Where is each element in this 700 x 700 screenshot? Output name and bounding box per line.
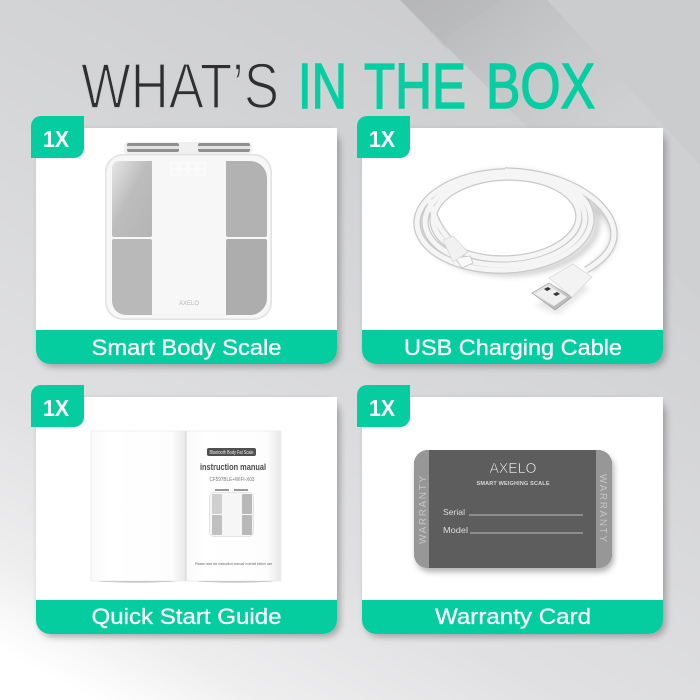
icon: warranty card: Serial: [443, 507, 465, 517]
icon: body scale: [105, 142, 272, 320]
label band: smart body scale: Smart Body Scale: [92, 335, 282, 360]
badge: quantity 1X: 1X: [369, 395, 396, 421]
label band: smart body scale: [36, 330, 337, 364]
icon: warranty card: AXELO: [490, 460, 536, 477]
title: THE: [364, 50, 466, 122]
title: [81, 50, 595, 122]
icon: warranty card: Model: [443, 525, 468, 535]
label band: warranty card: Warranty Card: [435, 604, 591, 629]
icon: instruction manual: Bluetooth Body Fat Scale: [210, 450, 254, 456]
title: BOX: [486, 50, 595, 122]
icon: usb cable: [415, 169, 614, 314]
label band: usb charging cable: [362, 330, 663, 364]
badge: quantity 1X: 1X: [43, 126, 70, 152]
badge: quantity 1X: [31, 385, 84, 427]
icon: instruction manual: CF597BLE+WIFI-X03: [210, 477, 254, 483]
icon: warranty card: WARRANTY: [418, 476, 429, 544]
label band: quick start guide: Quick Start Guide: [92, 604, 282, 629]
panel: warranty card: [357, 385, 666, 637]
title: WHAT’S: [81, 50, 279, 122]
icon: instruction manual: Please read the instruction manual in detail before use: [195, 562, 272, 566]
badge: quantity 1X: [31, 116, 84, 158]
icon: instruction manual: [91, 431, 281, 582]
label band: quick start guide: [36, 600, 337, 634]
label band: usb charging cable: USB Charging Cable: [404, 335, 622, 360]
title: IN: [298, 50, 347, 122]
icon: warranty card: WARRANTY: [597, 474, 608, 542]
panel: usb charging cable: [357, 116, 666, 367]
icon: body scale: AXELO: [179, 300, 199, 307]
panel: quick start guide: [31, 385, 340, 637]
badge: quantity 1X: [357, 385, 410, 427]
badge: quantity 1X: [357, 116, 410, 158]
badge: quantity 1X: 1X: [43, 395, 70, 421]
icon: warranty card: [414, 450, 614, 572]
panel: smart body scale: [31, 116, 340, 367]
icon: warranty card: SMART WEIGHING SCALE: [476, 481, 550, 487]
badge: quantity 1X: 1X: [369, 126, 396, 152]
icon: instruction manual: instruction manual: [200, 462, 266, 472]
label band: warranty card: [362, 600, 663, 634]
